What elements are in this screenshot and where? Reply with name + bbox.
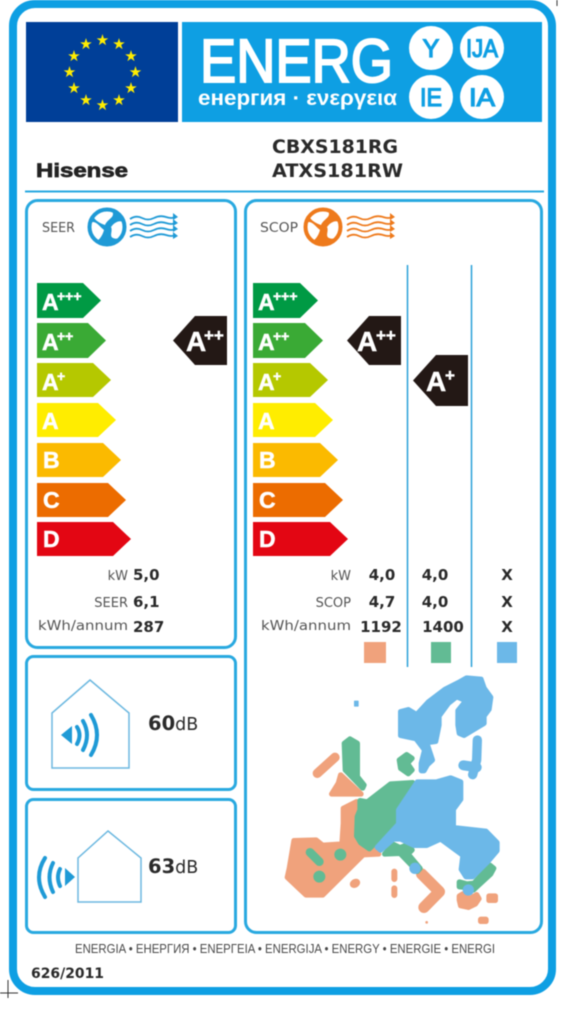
SCOP data table: X bbox=[501, 593, 513, 611]
rating marker A++: ++ bbox=[204, 326, 224, 345]
indoor noise value: 60dB bbox=[148, 712, 198, 735]
rating marker A++: A bbox=[186, 326, 206, 357]
SEER data table: 287 bbox=[133, 618, 164, 636]
SEER data table bbox=[38, 566, 164, 636]
arrow A++: ++ bbox=[273, 328, 289, 344]
arrow A+++: A bbox=[42, 289, 59, 315]
EU flag: ★ bbox=[67, 47, 81, 65]
panel: indoor noise bbox=[26, 656, 236, 790]
arrow D: D bbox=[259, 526, 276, 552]
arrow A+++: +++ bbox=[273, 288, 298, 304]
arrow B bbox=[253, 443, 338, 477]
arrow C: C bbox=[259, 487, 276, 513]
climate legend swatches bbox=[364, 642, 517, 663]
arrow B: B bbox=[43, 447, 60, 473]
arrow D bbox=[253, 522, 348, 556]
energy scale arrows bbox=[253, 283, 348, 556]
brand: Hisense: Hisense bbox=[36, 161, 128, 182]
arrow B: B bbox=[259, 447, 276, 473]
SEER data table: SEER bbox=[94, 596, 128, 611]
arrow A+ bbox=[37, 363, 111, 397]
climate map of Europe bbox=[287, 678, 497, 924]
SEER data table: 5,0 bbox=[133, 566, 160, 584]
SCOP data table: 4,7 bbox=[369, 593, 395, 611]
arrow A: A bbox=[42, 408, 59, 434]
SCOP data table: 1192 bbox=[360, 618, 402, 636]
regulation number: 626/2011 bbox=[31, 966, 104, 982]
arrow D bbox=[37, 522, 131, 556]
energy banner bbox=[182, 22, 542, 122]
SCOP data table bbox=[261, 566, 513, 636]
EU flag: ★ bbox=[124, 47, 138, 65]
SCOP data table: kWh/annum bbox=[261, 619, 351, 634]
EU flag: ★ bbox=[67, 79, 81, 97]
arrow A+: A bbox=[42, 369, 59, 395]
arrow A: A bbox=[258, 408, 275, 434]
title ENERG: ENERG bbox=[200, 27, 393, 95]
EU flag: ★ bbox=[112, 35, 126, 53]
panel: SEER cooling bbox=[26, 200, 236, 648]
icon: blue fan with waves bbox=[88, 208, 178, 246]
arrow C: C bbox=[43, 487, 60, 513]
SCOP data table: X bbox=[501, 566, 513, 584]
arrow A+++: A bbox=[258, 289, 275, 315]
panel: SCOP heating bbox=[246, 200, 542, 932]
arrow A++: A bbox=[42, 329, 59, 355]
arrow A+: + bbox=[57, 368, 65, 384]
arrow A bbox=[37, 403, 116, 437]
arrow C bbox=[253, 483, 343, 517]
EU flag bbox=[26, 22, 178, 122]
footer: multilingual energy text: ENERGIA • ЕНЕРГИЯ • ΕΝΕΡΓΕΙΑ • ENERGIJA • ENERGY • ENERGIE • ENERGI bbox=[75, 941, 495, 956]
SEER data table: 6,1 bbox=[133, 593, 160, 611]
model names: ATXS181RW bbox=[272, 161, 403, 182]
arrow A+++: +++ bbox=[57, 288, 82, 304]
arrow A+ bbox=[253, 363, 328, 397]
rating marker A+ bbox=[413, 355, 468, 406]
EU flag: ★ bbox=[112, 91, 126, 109]
arrow A++: A bbox=[258, 329, 275, 355]
rating marker A++ bbox=[347, 316, 401, 365]
EU flag: ★ bbox=[79, 91, 93, 109]
arrow A++ bbox=[253, 323, 323, 358]
circles: IE bbox=[420, 84, 442, 112]
arrow C bbox=[37, 483, 126, 517]
EU flag: ★ bbox=[79, 35, 93, 53]
rating marker A++: A bbox=[357, 326, 377, 357]
circles bbox=[409, 26, 504, 119]
model names bbox=[272, 137, 403, 182]
arrow A+++ bbox=[253, 283, 318, 318]
arrow B bbox=[37, 443, 121, 477]
circles: IA bbox=[469, 84, 495, 112]
SCOP data table: 4,0 bbox=[369, 566, 395, 584]
icon: house with sound bbox=[52, 680, 129, 768]
SCOP data table: X bbox=[501, 618, 513, 636]
icon: sound outside house bbox=[39, 831, 141, 902]
SEER label: SEER bbox=[42, 221, 75, 236]
EU flag: ★ bbox=[96, 31, 109, 49]
SEER data table: kWh/annum bbox=[38, 619, 128, 634]
SEER data table: kW bbox=[108, 569, 128, 584]
EU flag: ★ bbox=[96, 96, 109, 114]
SCOP data table: 4,0 bbox=[422, 566, 448, 584]
arrow D: D bbox=[43, 526, 60, 552]
SCOP data table: SCOP bbox=[316, 596, 351, 611]
EU flag: ★ bbox=[63, 63, 76, 81]
rating marker A+: A bbox=[426, 366, 446, 397]
SCOP data table: 1400 bbox=[422, 618, 464, 636]
panel: outdoor noise bbox=[26, 800, 236, 932]
circles: Y bbox=[423, 35, 440, 63]
model names: CBXS181RG bbox=[272, 137, 398, 158]
icon: orange fan with waves bbox=[304, 208, 395, 246]
circles: IJA bbox=[466, 35, 498, 63]
subtitle: енергия · ενεργεια bbox=[198, 87, 397, 110]
arrow A bbox=[253, 403, 333, 437]
rating marker A++ bbox=[173, 316, 227, 365]
EU flag: ★ bbox=[129, 63, 142, 81]
arrow A+++ bbox=[37, 283, 101, 318]
rating marker A+: + bbox=[445, 366, 455, 385]
energy scale arrows bbox=[37, 283, 131, 556]
EU flag: ★ bbox=[124, 79, 138, 97]
SCOP data table: kW bbox=[331, 569, 351, 584]
arrow A+: + bbox=[273, 368, 281, 384]
rating marker A++: ++ bbox=[376, 326, 396, 345]
arrow A++: ++ bbox=[57, 328, 73, 344]
arrow A+: A bbox=[258, 369, 275, 395]
arrow A++ bbox=[37, 323, 106, 358]
SCOP label: SCOP bbox=[260, 221, 298, 236]
outdoor noise value: 63dB bbox=[148, 855, 198, 878]
SCOP data table: 4,0 bbox=[422, 593, 448, 611]
